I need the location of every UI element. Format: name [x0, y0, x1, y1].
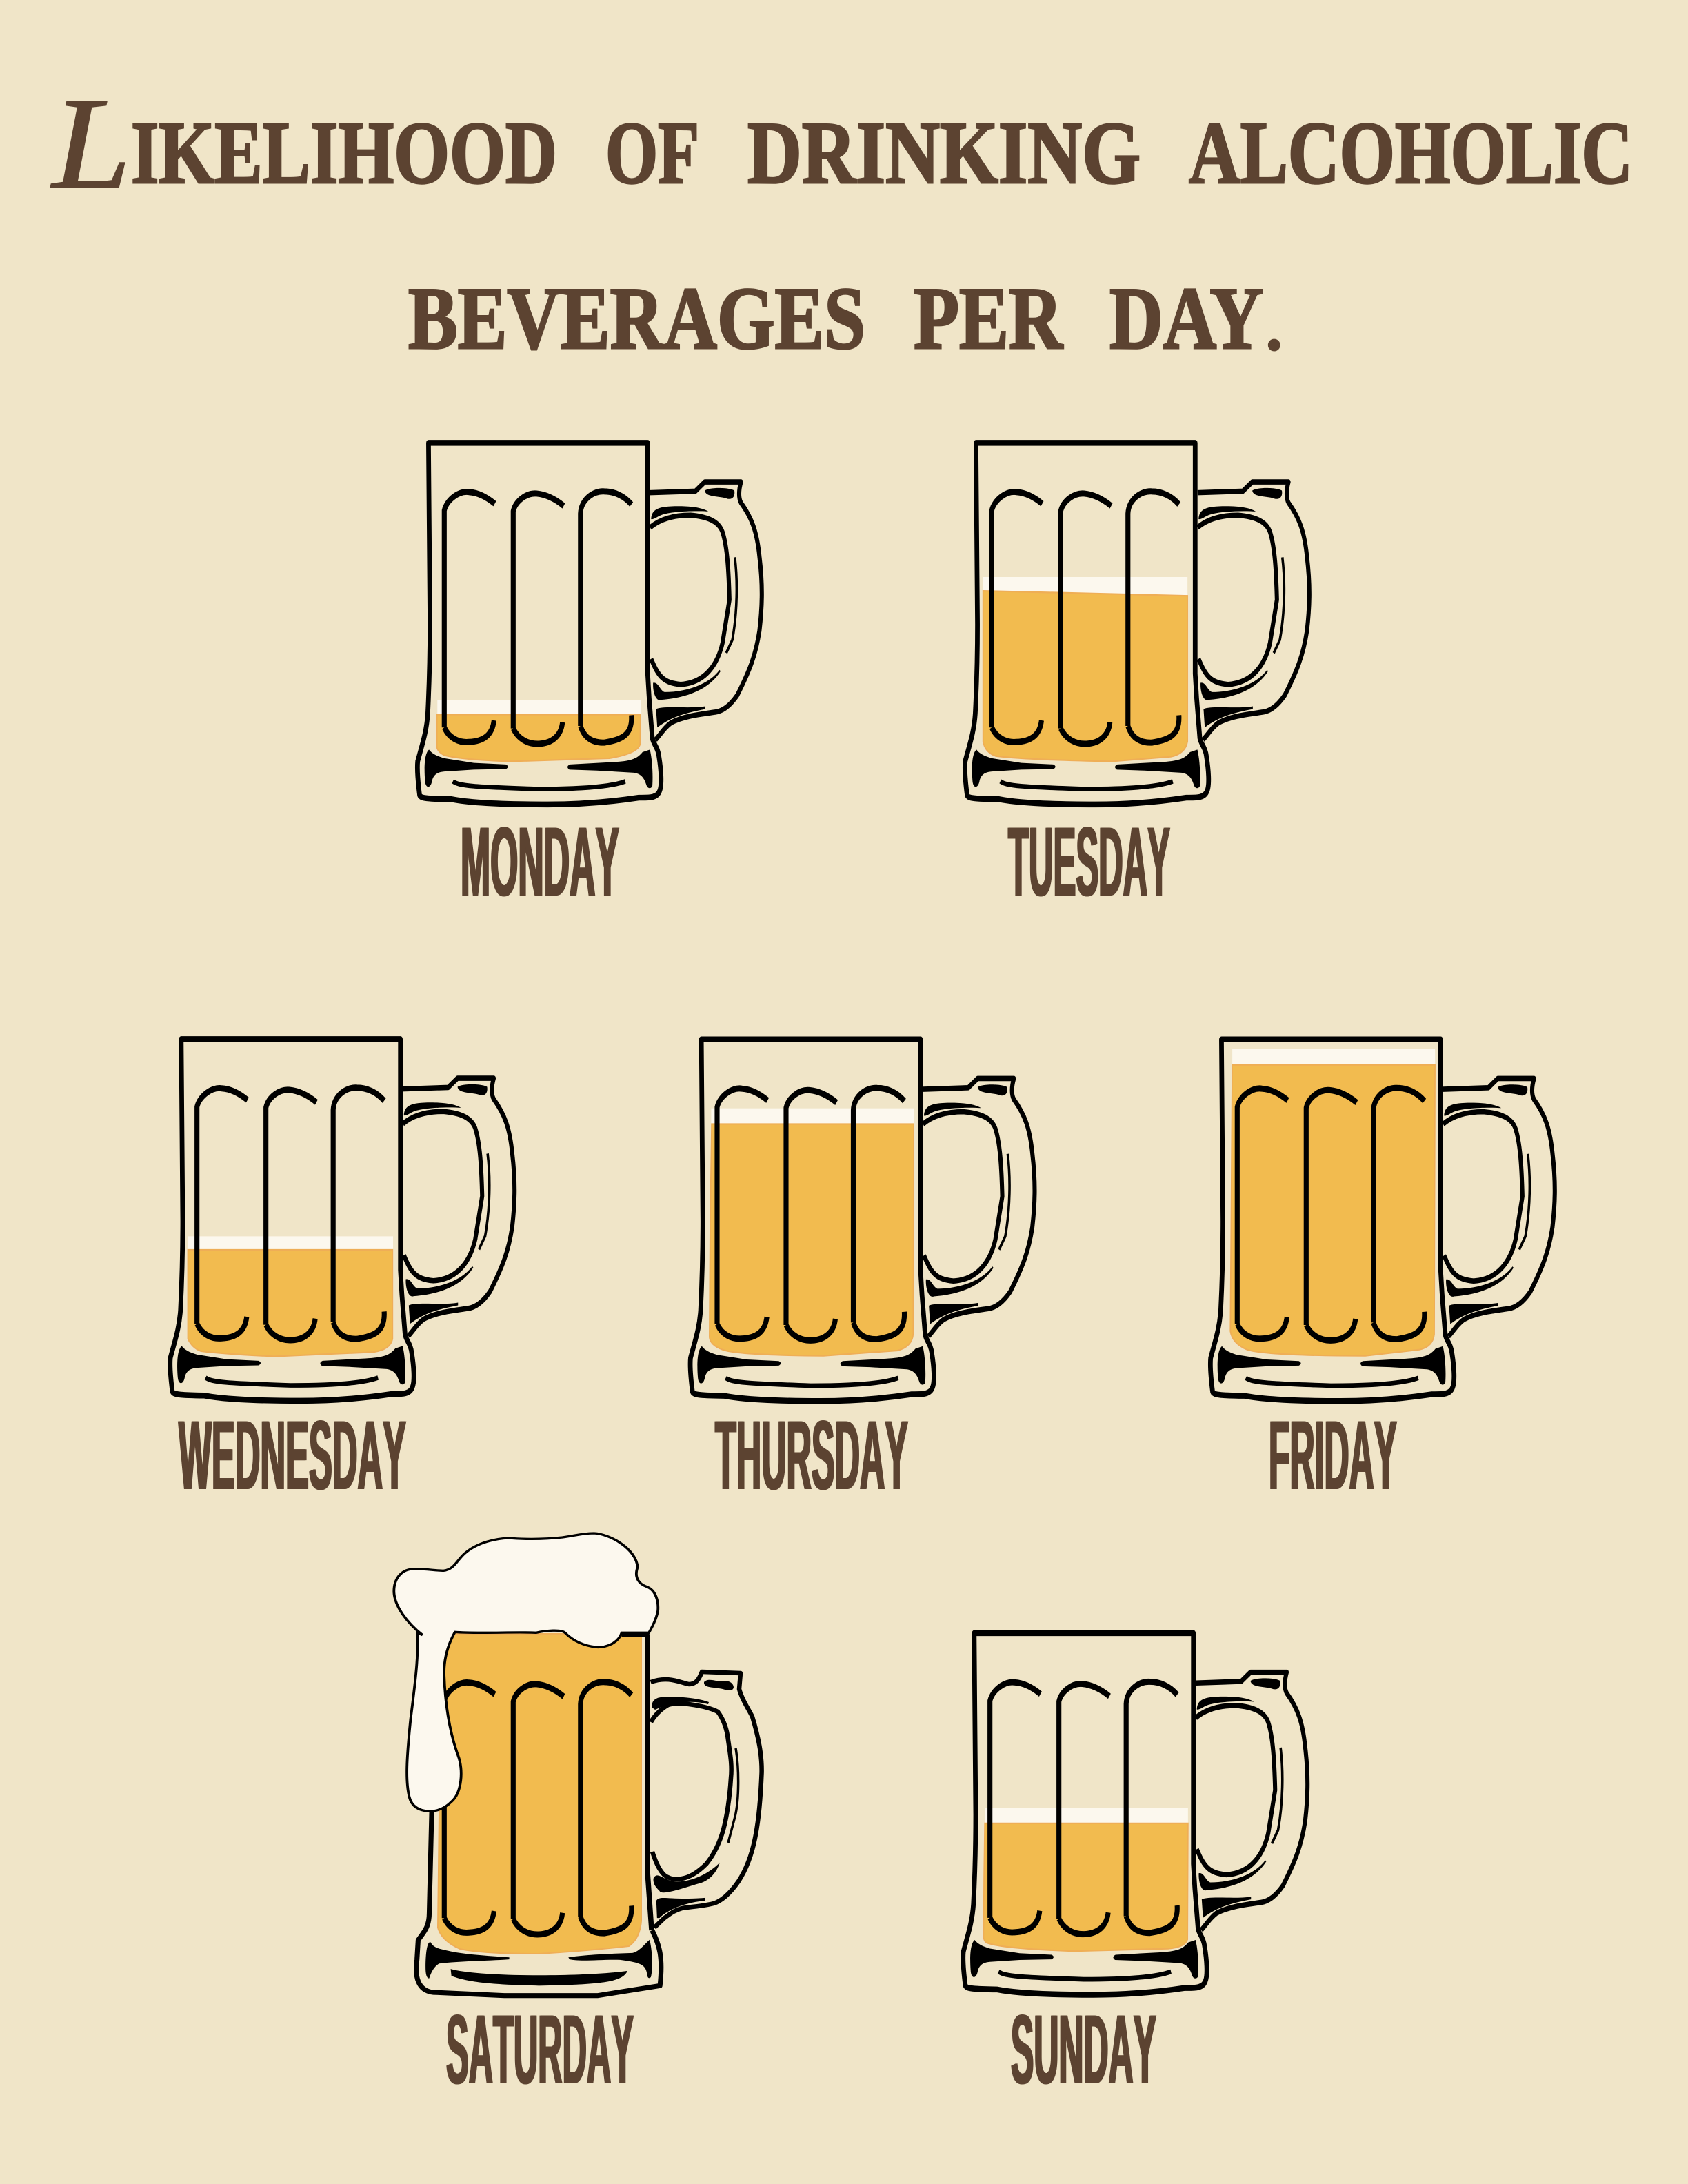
- title: IKELIHOOD: [131, 103, 557, 202]
- title: PER: [914, 269, 1064, 367]
- title: DRINKING: [747, 103, 1141, 202]
- mug: Saturday: [394, 1533, 762, 1996]
- mug: Wednesday: [170, 1039, 514, 1401]
- title: .: [1265, 283, 1284, 367]
- beer level: Thursday: [710, 1109, 914, 1356]
- title: DAY: [1109, 269, 1263, 367]
- mug: Sunday: [963, 1633, 1307, 1994]
- glass: Thursday: [690, 1040, 1035, 1401]
- text: TUESDAY: [1008, 807, 1170, 917]
- beer level: Wednesday: [188, 1236, 393, 1357]
- mug: Tuesday: [965, 443, 1309, 805]
- text: SUNDAY: [1011, 1995, 1156, 2105]
- mug: Monday: [417, 443, 762, 805]
- glass: Sunday: [963, 1633, 1307, 1994]
- glass: Saturday: [416, 1635, 762, 1996]
- title: [50, 72, 1633, 367]
- mug: Friday: [1210, 1040, 1555, 1401]
- mug: Thursday: [690, 1040, 1035, 1401]
- glass: Tuesday: [965, 443, 1309, 805]
- title: L: [50, 72, 131, 216]
- title: OF: [605, 103, 699, 202]
- text: FRIDAY: [1269, 1401, 1397, 1510]
- text: MONDAY: [461, 807, 619, 917]
- beer level: Sunday: [983, 1808, 1188, 1951]
- title: BEVERAGES: [408, 269, 865, 367]
- text: SATURDAY: [446, 1995, 634, 2105]
- beer level: Monday: [437, 700, 641, 761]
- foam overflow: Saturday: [394, 1533, 658, 1811]
- beer level: Friday: [1230, 1049, 1435, 1356]
- glass: Friday: [1210, 1040, 1555, 1401]
- glass: Wednesday: [170, 1039, 514, 1401]
- text: THURSDAY: [715, 1401, 908, 1510]
- glass: Monday: [417, 443, 762, 805]
- beer level: Saturday: [438, 1634, 641, 1954]
- text: WEDNESDAY: [179, 1401, 406, 1510]
- beer level: Tuesday: [983, 577, 1187, 761]
